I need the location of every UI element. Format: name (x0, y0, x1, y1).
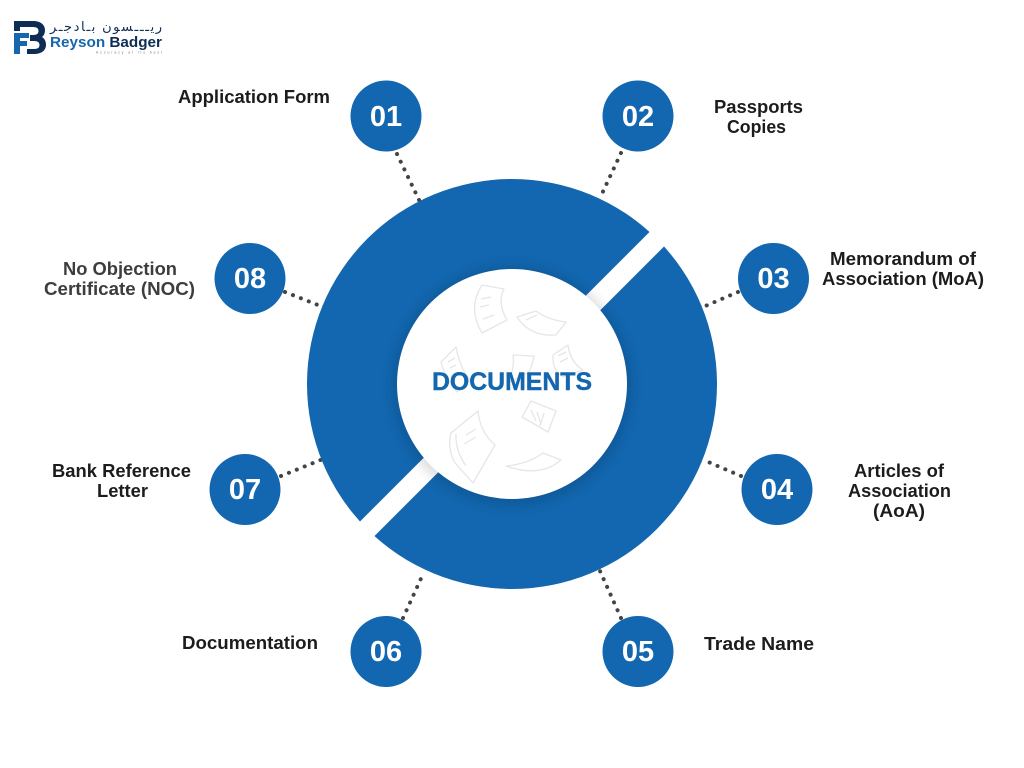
inner circle shadow (392, 266, 632, 506)
badge 08 (214, 243, 286, 314)
badge 04: 04 (761, 474, 793, 506)
label: memorandum of association: Association (MoA) (822, 269, 984, 289)
label: bank reference letter (52, 461, 191, 501)
badge 04 (742, 454, 812, 525)
label: articles of association: (AoA) (873, 501, 925, 521)
logo tagline: Accuracy at its best (96, 50, 162, 54)
badge 05 (602, 616, 674, 687)
badge 02 (602, 80, 674, 152)
logo (14, 19, 162, 54)
label: no objection certificate (44, 259, 195, 299)
badge 01 (350, 80, 422, 152)
badge 06: 06 (370, 636, 402, 668)
label: no objection certificate: Certificate (NOC) (44, 279, 195, 299)
label: articles of association (848, 461, 951, 521)
label: memorandum of association: Memorandum of (830, 249, 977, 269)
label: bank reference letter: Bank Reference (52, 461, 191, 481)
badge 06 (350, 616, 422, 687)
label: documentation: Documentation (182, 633, 318, 653)
badge 03 (738, 243, 809, 314)
label: application form: Application Form (178, 87, 330, 107)
label: articles of association: Articles of (854, 461, 945, 481)
donut ring (300, 146, 735, 610)
logo icon (14, 21, 46, 54)
connector dots (281, 153, 741, 618)
logo arabic name: ريـــسون بـادجـر (49, 19, 162, 35)
label: trade name: Trade Name (704, 634, 814, 654)
badge 03: 03 (757, 263, 790, 295)
badge 05: 05 (622, 636, 654, 668)
icon: flying papers (441, 285, 583, 483)
badge 07: 07 (229, 474, 261, 506)
badge 02: 02 (622, 101, 654, 133)
badge 08: 08 (234, 263, 266, 295)
label: no objection certificate: No Objection (63, 259, 177, 279)
heading: documents: DOCUMENTS (432, 368, 592, 396)
center circle (397, 269, 627, 499)
label: articles of association: Association (848, 481, 951, 501)
label: passports copies: Copies (727, 117, 786, 137)
label: passports copies: Passports (714, 97, 803, 117)
label: bank reference letter: Letter (97, 481, 148, 501)
badge 01: 01 (370, 101, 402, 133)
logo wordmark: Reyson Badger (50, 34, 162, 51)
label: memorandum of association (822, 249, 984, 289)
badge 07 (210, 454, 280, 525)
label: passports copies (714, 97, 803, 137)
